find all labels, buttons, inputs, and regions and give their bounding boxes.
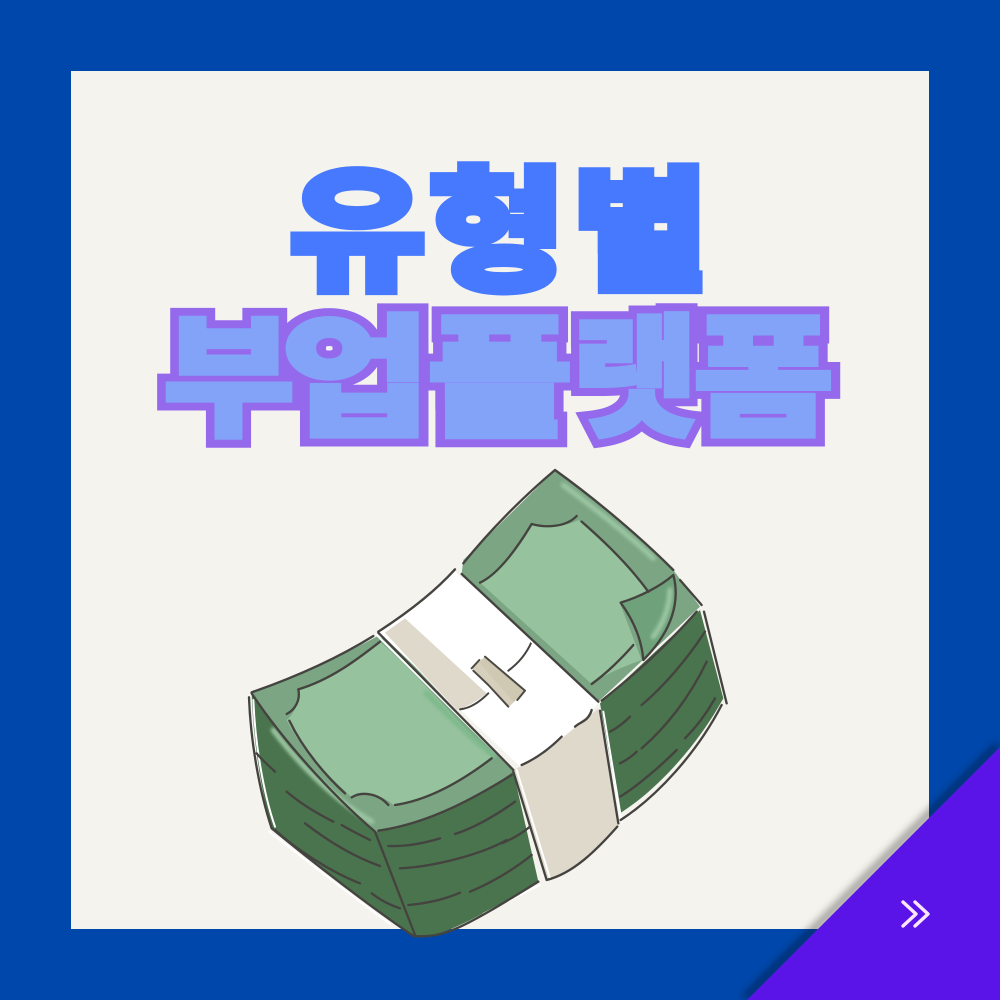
right stack side [600,610,723,813]
band cast shadow on left note [427,693,493,755]
left note face [287,642,492,805]
left highlight [273,730,372,822]
band front [513,708,618,880]
illustration: stack of money [249,470,727,937]
right top face [462,470,700,702]
title line 1: 형 [428,158,566,308]
title line 1: 별 [572,158,709,308]
title line 2: 부 [163,305,295,453]
title line 2: 랫 [572,305,698,453]
icon: double chevron [903,902,928,926]
corner tab shadow [745,745,998,998]
right top highlight [563,485,653,558]
title line 2: 폼 [693,305,834,453]
paper band top [378,572,598,767]
ink outlines [249,470,727,936]
title line 2 [163,305,834,453]
left top face [252,637,513,832]
title line 2: 플 [427,305,573,453]
band buckle [460,642,532,709]
title line 2: 랫 [572,305,698,453]
title line 1 [289,158,709,308]
right note face [480,520,648,684]
fold highlight [653,590,670,637]
title line 2: 플 [427,305,573,453]
title line 2: 폼 [693,305,834,453]
central panel [71,71,929,929]
left stack side [252,693,538,937]
white edge highlights [253,578,622,924]
title line 2: 업 [281,305,431,453]
title line 1: 유 [289,158,426,308]
title line 2: 부 [163,305,295,453]
corner tab [747,747,1000,1000]
band shadow strip [385,618,487,710]
folded corner [621,575,676,660]
title line 2: 업 [281,305,431,453]
